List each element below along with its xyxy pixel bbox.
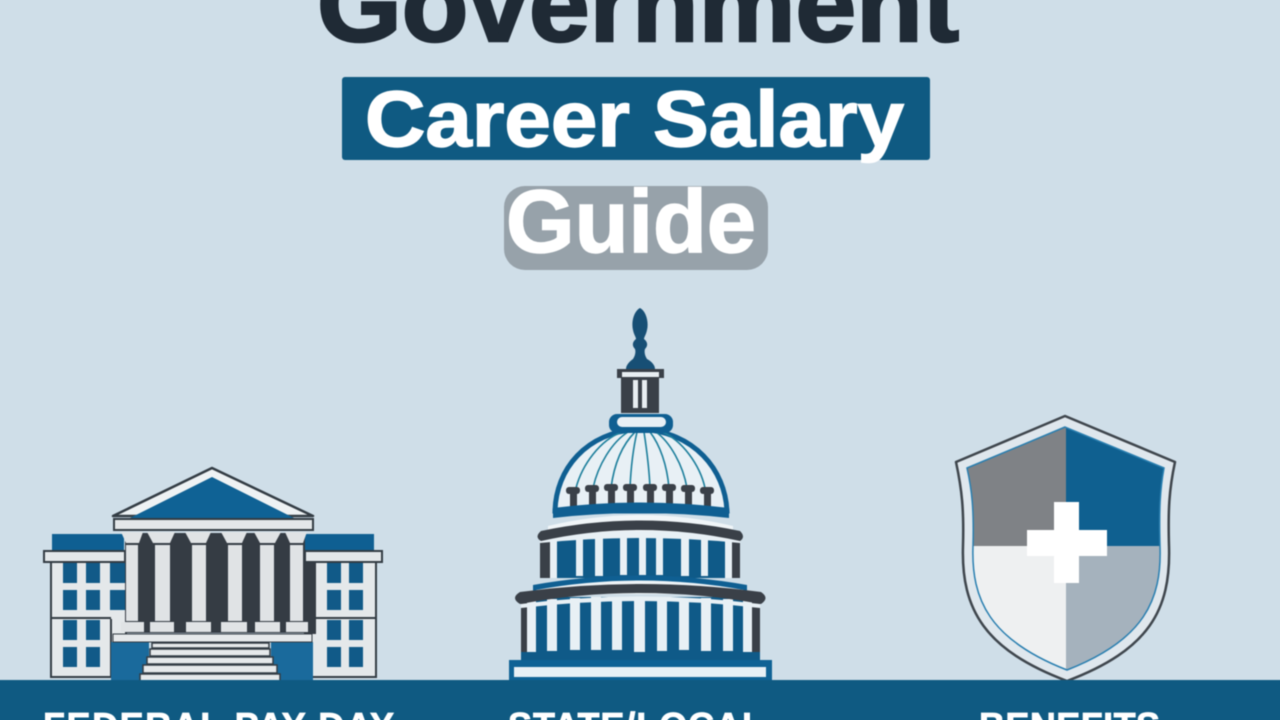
- ribs: [576, 432, 705, 488]
- icon: capitol dome: [509, 308, 772, 681]
- floor: [113, 634, 312, 642]
- finial: [626, 308, 655, 369]
- pediment: [113, 468, 313, 530]
- lantern: [617, 369, 664, 413]
- balustrade posts: [566, 484, 714, 507]
- left wing: [44, 551, 126, 677]
- wing roofs: [52, 534, 374, 551]
- cross: [1027, 502, 1107, 583]
- collar: [609, 414, 673, 433]
- pill: Guide: Guide: [506, 171, 756, 271]
- upper dark ring: [538, 520, 743, 541]
- columns: [121, 532, 308, 632]
- title: Government Career Salary Guide: [317, 0, 959, 271]
- shield outline: [956, 416, 1175, 681]
- stair side blocks: [111, 642, 313, 682]
- upper colonnade: [540, 531, 740, 578]
- right wing: [305, 551, 382, 677]
- steps: [140, 643, 280, 682]
- banner: Career Salary: Career Salary: [365, 74, 904, 163]
- icon: federal building: [44, 468, 382, 682]
- shield quadrants: [967, 428, 1164, 670]
- lower dark ring: [515, 584, 766, 604]
- dome shell: [555, 429, 727, 511]
- icon: benefits shield: [956, 416, 1175, 681]
- plinth: [509, 652, 772, 681]
- footer band: [0, 680, 1280, 720]
- mid band: [533, 576, 747, 592]
- portico dark backing: [125, 533, 305, 633]
- dome base band: [553, 502, 729, 518]
- lower colonnade: [521, 596, 760, 657]
